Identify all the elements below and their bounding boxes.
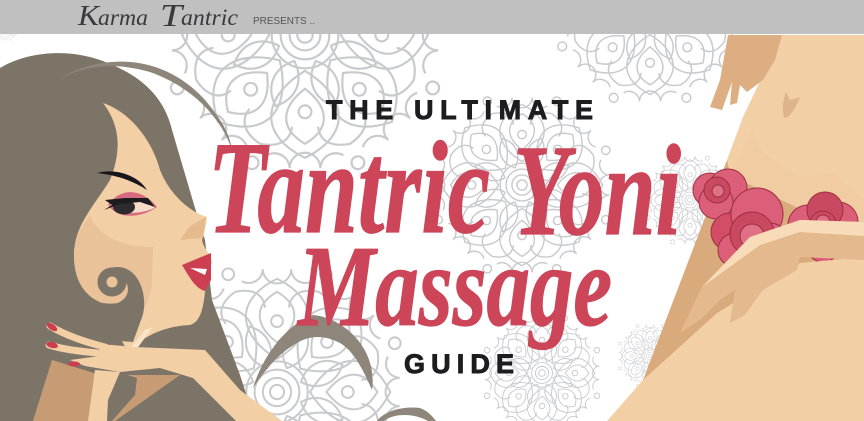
curl spiral [102,272,122,292]
shaded side [643,160,864,380]
illustration: torso with roses [607,35,864,421]
title line: Tantric Yoni: Yoni [513,119,681,263]
nails [45,321,80,366]
face shading [74,216,153,335]
iris [113,200,135,214]
teeth [190,268,207,275]
eye shadow [108,192,157,216]
fingers [49,326,110,354]
hair swoosh lower centre [253,315,436,421]
rose left [693,169,747,219]
lower leg [607,257,864,421]
hair [0,53,255,421]
face [74,103,212,352]
title line: Guide: GUIDE [404,349,514,379]
title line: Massage: Massage [297,223,612,351]
title line: Tantric Yoni: Tantric [208,114,490,261]
neck highlight [130,327,153,350]
arm across [680,220,864,333]
hair curl [45,267,144,342]
torso [727,35,864,240]
raised hand [710,35,782,110]
hair beneath arm [100,372,137,421]
nose shadow [180,217,206,240]
header bar [0,0,864,34]
logo: Karma Tantric [77,0,238,33]
illustration: woman in profile [0,53,282,421]
eyelashes [104,198,155,210]
rose right [788,192,858,262]
eye [110,199,155,213]
stray hair strand [58,62,232,150]
arm highlight [702,220,864,287]
eyebrow [97,171,147,190]
soft crease shading [730,130,864,240]
rose centre [711,188,787,267]
supporting arm [88,370,120,421]
lower arm in shadow [33,360,180,421]
hand and forearm [70,344,282,421]
logo: Karma Tantric: K [77,1,100,32]
logo: Karma Tantric: antric [181,5,238,30]
title [208,95,681,379]
presents label: PRESENTS .. [253,15,315,27]
logo: Karma Tantric: arma [98,5,148,30]
title line: The Ultimate: THE ULTIMATE [326,95,593,125]
navel shading [783,92,800,118]
lips [182,253,211,291]
